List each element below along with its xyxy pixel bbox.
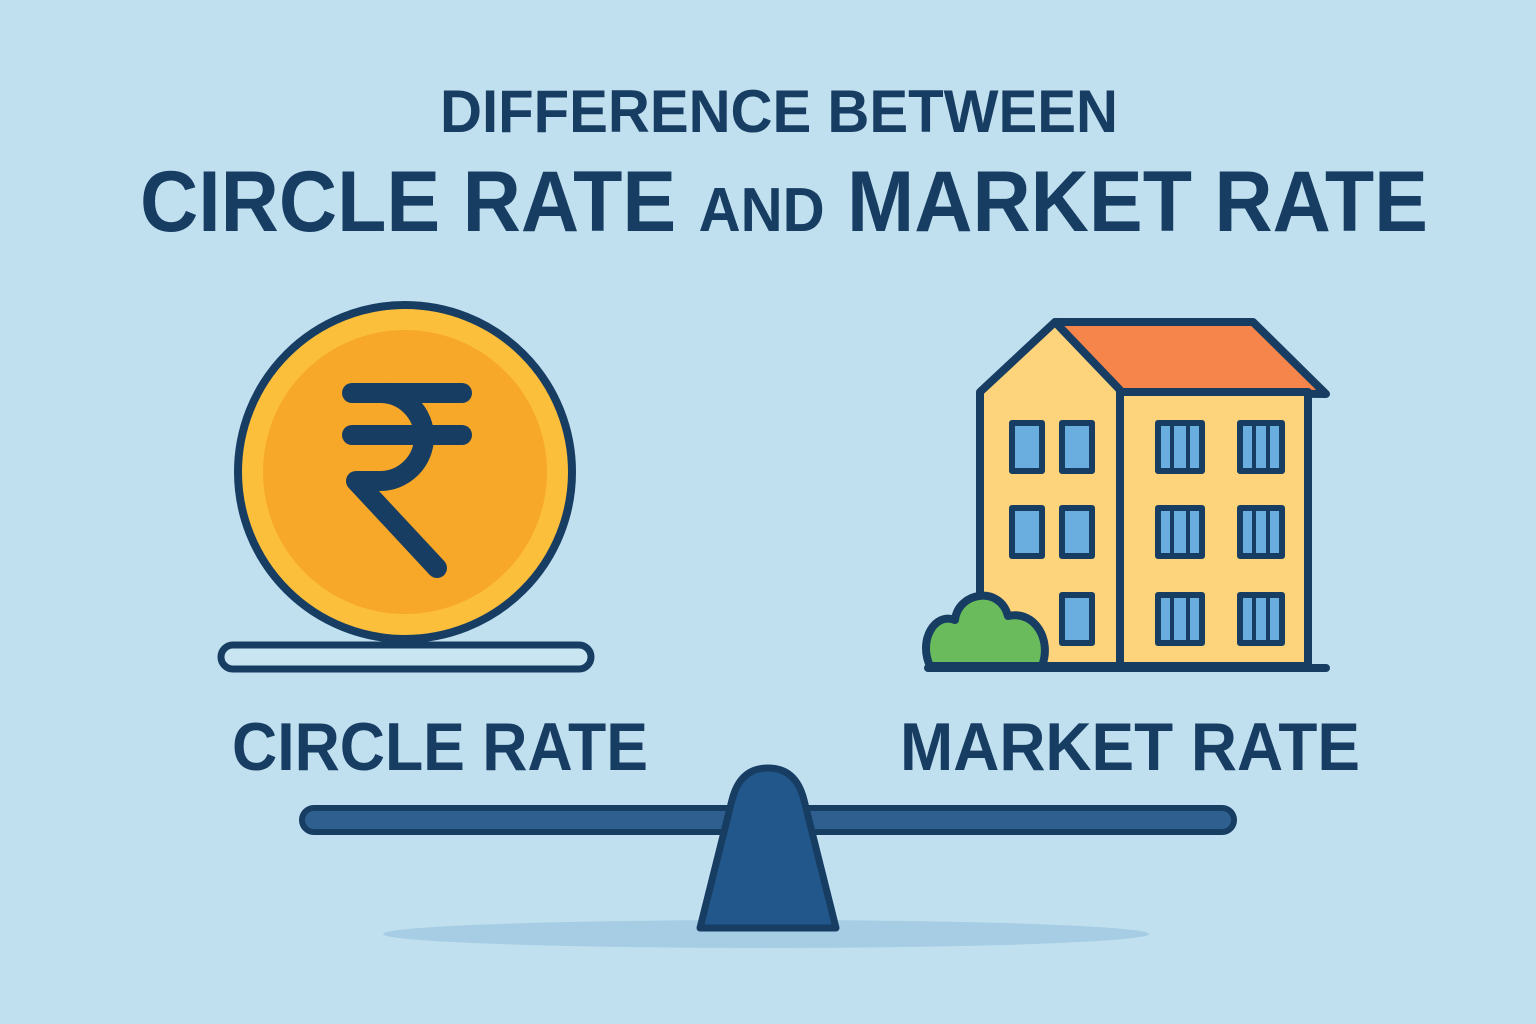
title: CIRCLE RATE AND MARKET RATE	[140, 154, 1428, 250]
title	[140, 78, 1428, 250]
title: DIFFERENCE BETWEEN	[440, 78, 1118, 145]
label: market rate: MARKET RATE	[900, 709, 1360, 785]
seesaw	[302, 768, 1234, 948]
label: circle rate: CIRCLE RATE	[232, 709, 648, 785]
icon: house	[926, 322, 1326, 668]
icon: rupee coin	[221, 305, 591, 669]
